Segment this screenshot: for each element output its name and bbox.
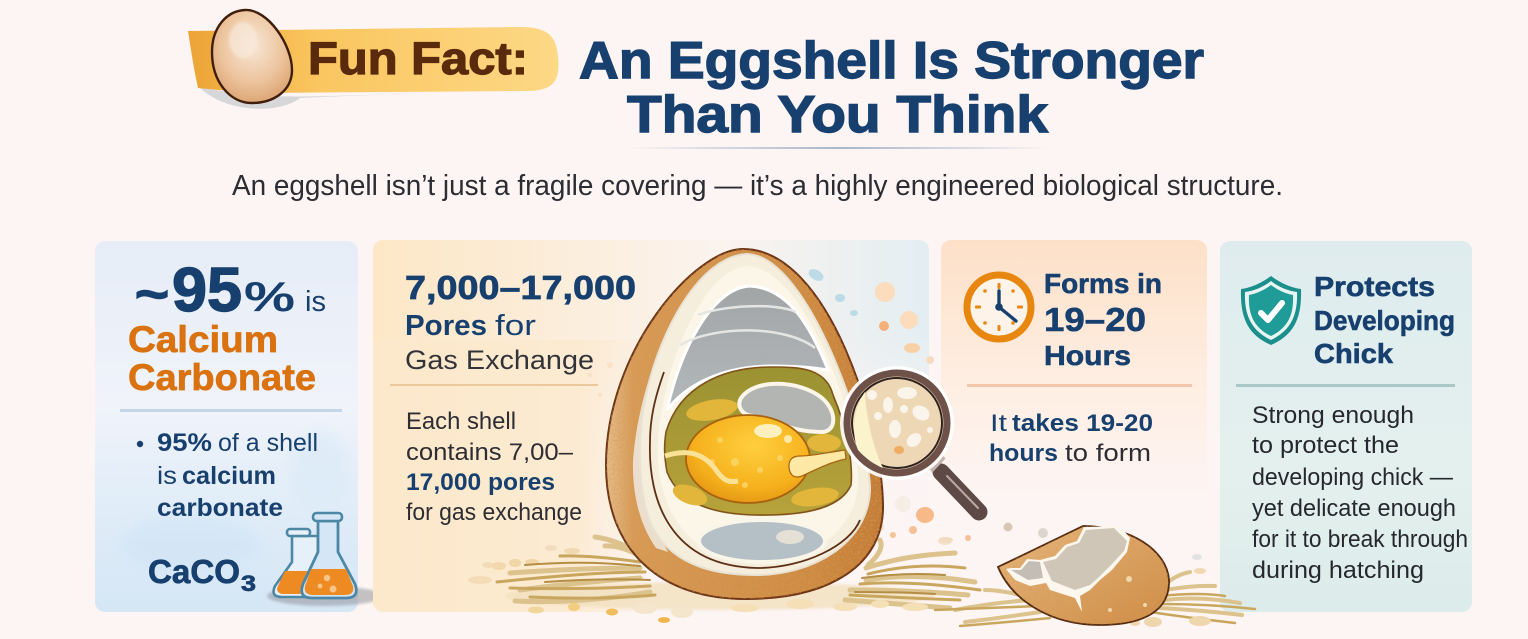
subtitle: An eggshell isn’t just a fragile covering — it’s a highly engineered biological structure. xyxy=(232,170,1283,202)
ribbon xyxy=(188,27,558,93)
body text: to form xyxy=(1065,440,1151,467)
heading: Calcium Carbonate: Carbonate xyxy=(128,357,316,398)
bullet text: 95% xyxy=(157,429,212,457)
heading: Protects Developing Chick xyxy=(1314,271,1455,369)
heading: Forms in 19–20 Hours: 19–20 xyxy=(1044,301,1146,338)
shell membrane xyxy=(640,254,870,575)
title: Than You Think xyxy=(627,86,1048,144)
heading: 7,000–17,000 pores: Gas Exchange xyxy=(405,345,594,375)
body text: contains 7,00– xyxy=(406,439,574,466)
bullet text: is xyxy=(157,462,177,490)
body text: during hatching xyxy=(1252,557,1424,584)
stat: ~95% is: is xyxy=(305,286,326,318)
panel: formation time xyxy=(941,240,1207,500)
panel: calcium carbonate xyxy=(95,241,383,612)
body text: developing chick — xyxy=(1252,464,1453,491)
heading: Protects Developing Chick: Chick xyxy=(1314,338,1393,369)
body text: 17,000 pores xyxy=(406,469,555,496)
lower grey sac xyxy=(699,520,825,562)
formula: CaCO3: CaCO xyxy=(148,553,240,590)
heading: 7,000–17,000 pores xyxy=(405,269,636,375)
icon: egg xyxy=(212,10,292,103)
body text: takes 19-20 xyxy=(1012,410,1153,437)
speckles: watercolor dots xyxy=(468,267,1206,584)
illustration: egg cross-section xyxy=(600,245,890,605)
icon: shield xyxy=(1241,276,1301,345)
formula: CaCO3: 3 xyxy=(241,571,256,596)
yolk xyxy=(686,415,810,503)
icon: magnifying glass xyxy=(840,366,979,512)
title: An Eggshell Is Stronger xyxy=(579,32,1204,90)
yellow deposits xyxy=(670,396,841,510)
body text: for it to break through xyxy=(1252,526,1468,553)
bullet text: of a shell xyxy=(218,429,318,457)
body text xyxy=(406,408,582,526)
body text: It xyxy=(990,410,1007,437)
body text: for gas exchange xyxy=(406,499,582,526)
stat: ~95% is: % xyxy=(244,273,295,320)
heading: Calcium Carbonate xyxy=(128,319,316,398)
heading: Forms in 19–20 Hours: Forms in xyxy=(1044,268,1162,299)
body text: Each shell xyxy=(406,408,516,435)
title xyxy=(579,32,1204,144)
stat: ~95% is: ~ xyxy=(135,266,169,322)
stat: ~95% is: 95 xyxy=(172,256,242,325)
body text: hours xyxy=(989,440,1058,467)
bullet text xyxy=(137,429,318,522)
grey air chamber xyxy=(667,286,828,410)
heading: 7,000–17,000 pores: for xyxy=(495,310,536,342)
outer shell xyxy=(606,249,883,599)
body text: yet delicate enough xyxy=(1252,495,1456,522)
icon: flasks xyxy=(267,513,383,606)
olive albumen xyxy=(665,367,851,515)
heading: 7,000–17,000 pores: 7,000–17,000 xyxy=(405,269,636,306)
bullet text: carbonate xyxy=(157,494,283,522)
body text: to protect the xyxy=(1252,432,1399,459)
rough white shell edge xyxy=(633,345,668,552)
grey pill xyxy=(739,384,833,432)
stat: ~95% is xyxy=(135,256,326,325)
body text xyxy=(989,410,1153,467)
heading: 7,000–17,000 pores: Pores xyxy=(405,310,487,342)
heading: Forms in 19–20 Hours: Hours xyxy=(1044,340,1131,371)
body text xyxy=(1252,402,1468,584)
panel: pores xyxy=(373,240,929,612)
panel: protects chick xyxy=(1220,241,1472,612)
badge label: Fun Fact: xyxy=(308,33,528,84)
icon: clock xyxy=(967,275,1031,339)
heading: Forms in 19–20 Hours xyxy=(1044,268,1162,371)
body text: Strong enough xyxy=(1252,402,1414,429)
nest: straw under broken shell xyxy=(935,572,1255,627)
heading: Protects Developing Chick: Developing xyxy=(1314,305,1455,336)
badge: Fun Fact xyxy=(188,10,558,109)
heading: Protects Developing Chick: Protects xyxy=(1314,271,1435,302)
illustration: broken eggshell xyxy=(995,522,1175,630)
enlarged pores xyxy=(867,387,933,450)
nest: straw under large egg xyxy=(497,537,980,623)
heading: Calcium Carbonate: Calcium xyxy=(128,319,278,360)
bullet text: calcium xyxy=(182,462,276,490)
